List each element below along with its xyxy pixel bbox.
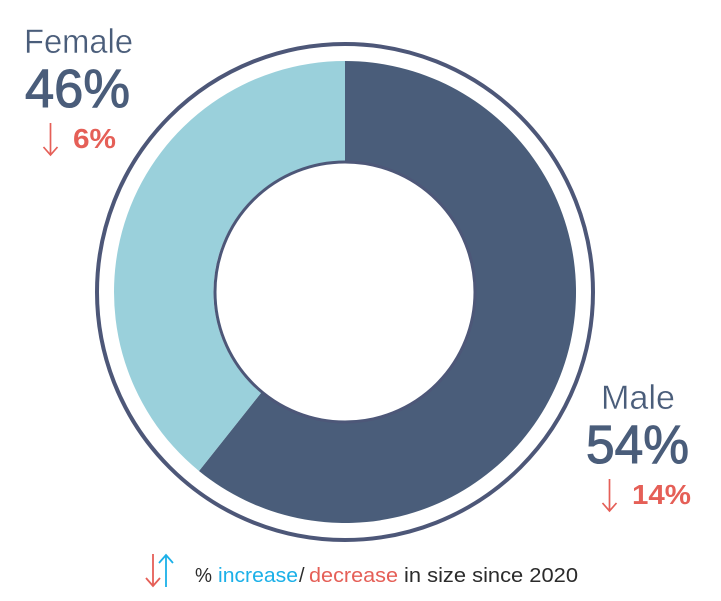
female value: 46% (25, 59, 130, 119)
male heading: Male (601, 379, 675, 417)
female change: 6% (73, 123, 116, 154)
icon: legend up arrow (159, 555, 173, 587)
label: male (586, 379, 691, 511)
donut chart (97, 44, 593, 540)
outer ring (97, 44, 593, 540)
icon: female down arrow (44, 123, 58, 155)
legend text: / (299, 565, 305, 587)
female heading: Female (24, 23, 133, 61)
legend text: in size since 2020 (404, 565, 578, 587)
legend (146, 554, 578, 587)
male value: 54% (586, 415, 689, 475)
icon: male down arrow (602, 479, 616, 511)
male change: 14% (632, 479, 691, 510)
legend text (195, 565, 578, 587)
inner circle outline (215, 162, 475, 422)
label: female (24, 23, 133, 155)
legend text: increase (218, 565, 298, 587)
legend text: decrease (309, 565, 398, 587)
segment: female 46% (114, 61, 345, 471)
segment: male 54% (199, 61, 576, 523)
legend text: % (195, 565, 212, 587)
icon: legend down arrow (146, 554, 160, 586)
